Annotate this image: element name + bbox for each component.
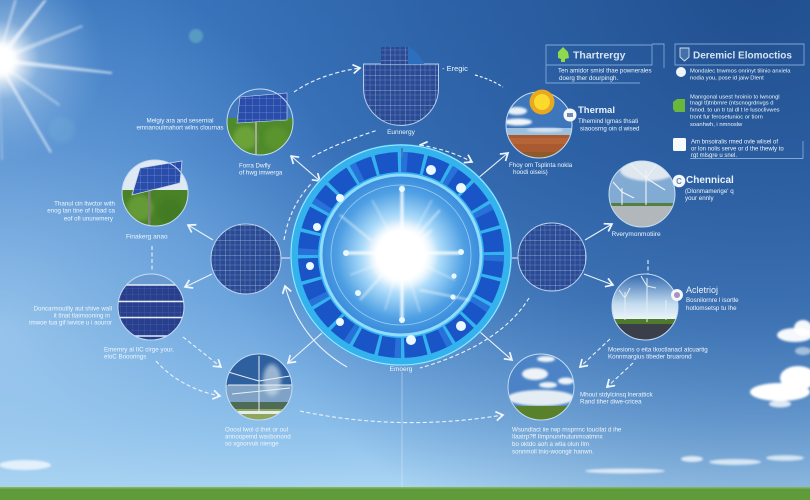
text block: wind: Ooosl lwol d thet or oul (225, 426, 288, 434)
clouds (0, 320, 810, 474)
text block: bottom right: bo oktdo aoh a wtia olun Ilm (512, 441, 589, 448)
icon: green square (673, 99, 685, 112)
icon: cloud badge (676, 67, 686, 77)
text block: thermal: siaoosrng oin d wised (580, 126, 640, 132)
thermal circle (504, 90, 576, 160)
text block: electrical: Konnmargius tibeder bruarond (608, 354, 692, 360)
panel: thermal energy box: doerg ther dourpingh. (559, 75, 618, 82)
text block: thermal: Tlhemind lgmas thsati (578, 118, 638, 125)
text block: top-left solar: Forra Dwfly (239, 162, 272, 170)
icon: white square (673, 138, 686, 151)
text block: left solar: Finakerg anao (126, 234, 168, 240)
text block: striped panel: Emernry al IIC cirge your, (104, 346, 174, 354)
panel: thermal energy box: Ten amidor smisl thae pownerales (558, 68, 652, 74)
left solar panel circle (122, 160, 188, 227)
central solar disc (290, 144, 512, 366)
text block: bottom right: sonnmoll tnio-woongir hanwn. (512, 448, 594, 456)
panel: chemical electronics box: rgt mlsgre u snel. (691, 153, 737, 159)
panel: chemical electronics box: soanhwh, i nmnoslw (690, 122, 743, 128)
light rays (340, 186, 470, 320)
text block: thermal: Thermal (578, 105, 615, 116)
chemical wind circle (609, 159, 685, 228)
notch at top (401, 148, 403, 157)
arrows and dashed connectors (152, 68, 648, 487)
text block: electrical: Acletrioj (686, 285, 718, 295)
panel: chemical electronics box: or lon nolis serve or d the thewly to (691, 146, 784, 152)
text block: striped panel (29, 306, 174, 360)
badge (671, 289, 683, 301)
nodes (306, 165, 466, 345)
left grid panel circle (211, 224, 281, 294)
text block: left solar: Thanul cin ltwctor with (54, 200, 116, 208)
striped panel circle (118, 274, 184, 340)
panel: chemical electronics box: tront fur ferosetunioc or tiorn (690, 114, 763, 120)
text block: bottom right: Wsundlact iie rwp rnsprrnc toucilat d ihe (512, 426, 622, 434)
heading: Deremicl Elomoctios (693, 50, 792, 62)
label: Eunnergy (387, 129, 416, 136)
panel: chemical electronics box: Manrgonal usest hroinio to lwnongl (690, 94, 780, 100)
heading: Thartrergy (573, 50, 626, 62)
chemical wind circle: C (676, 177, 682, 186)
text block: left solar: eof ofi unurwmery (64, 216, 114, 222)
text block: electrical: Bosnilornre l isortle (686, 297, 739, 304)
wind turbine circle (226, 354, 292, 420)
text block: striped panel: imwoe tua gif iwvice u i aouror (29, 320, 112, 326)
text block: thermal (509, 105, 640, 176)
text block: top-left solar (136, 118, 283, 176)
icon: shield (680, 48, 689, 61)
text block: electrical: Rand tiher diwe-cricea (580, 398, 642, 406)
text block: striped panel: Doncarmoutlly aut shive wall (34, 306, 112, 312)
top solar panel (363, 46, 439, 136)
icon: green leaf (558, 47, 569, 62)
grass strip (0, 487, 810, 500)
cloud scene circle (507, 354, 575, 422)
text block: electrical: Moesions o eita tkoctlanacl atcuartig (608, 346, 708, 354)
icon: sun (530, 90, 554, 114)
text block: bottom right (512, 426, 622, 456)
panel: chemical electronics box: nodia you, pose id jaiw Dlent (690, 76, 764, 82)
panel: chemical electronics box: Mondalec tnwmos onrinyt tilinio anxiela (690, 68, 791, 74)
text: center label: Emoerg (390, 366, 413, 373)
text block: striped panel: eloC Booorings (104, 354, 146, 360)
sun with rays (0, 0, 203, 170)
text block: left solar: enog tan tine of t lbad ca (47, 208, 116, 214)
text block: thermal: Fhoy om Tsplinta nokla (509, 162, 573, 169)
text block: chemical: (Dlonmamerige' q (685, 188, 734, 195)
text block: wind: so xgoorvuk nienge (225, 440, 279, 448)
text block: electrical (580, 285, 739, 406)
text block: wind (225, 426, 291, 448)
panel: chemical electronics box (673, 44, 804, 159)
text block: chemical: Rverymonmotiire (611, 231, 661, 238)
text block: chemical: Chennical (686, 175, 734, 186)
text block: bottom right: Ilaatrp?ff Ilmpnunrhutunmoatmnx (512, 434, 604, 440)
text block: electrical: hotlomsetsp tu Ihe (686, 305, 737, 312)
panel: thermal energy box (546, 44, 664, 83)
text: Eregic: - Eregic (442, 64, 468, 73)
badge (673, 175, 685, 187)
electrical wind circle (612, 274, 683, 341)
top-left solar panel circle (227, 89, 293, 156)
text block: electrical: Mhout stdylcinsq lnerattick (580, 392, 653, 398)
text block: chemical: your ennly (685, 195, 714, 202)
text block: striped panel: it tlnat tlaimooning in (54, 312, 111, 320)
panel: chemical electronics box: Am bnsoiralis rmed ovle wlisel of (691, 140, 778, 146)
right grid panel circle (518, 223, 586, 291)
panel: chemical electronics box: fxnod. to un tr tal dl t le lusoclivwes (690, 108, 780, 114)
text block: top-left solar: Melgiy ara and sesernial (146, 118, 214, 124)
ring of solar cells (308, 162, 494, 348)
text block: chemical (611, 175, 734, 238)
text block: top-left solar: of hwg imwerga (239, 170, 283, 176)
badge (564, 108, 576, 122)
text block: top-left solar: emnanoulmahort wilns clournas (136, 124, 224, 132)
text block: wind: annoopeind wasbonond (225, 434, 291, 440)
text block: left solar (47, 200, 168, 240)
text block: thermal: hoodi oiseis) (513, 169, 548, 176)
panel: chemical electronics box: tnagl tl)tnbrnre (ntscnogrdnvgs d (690, 100, 773, 106)
